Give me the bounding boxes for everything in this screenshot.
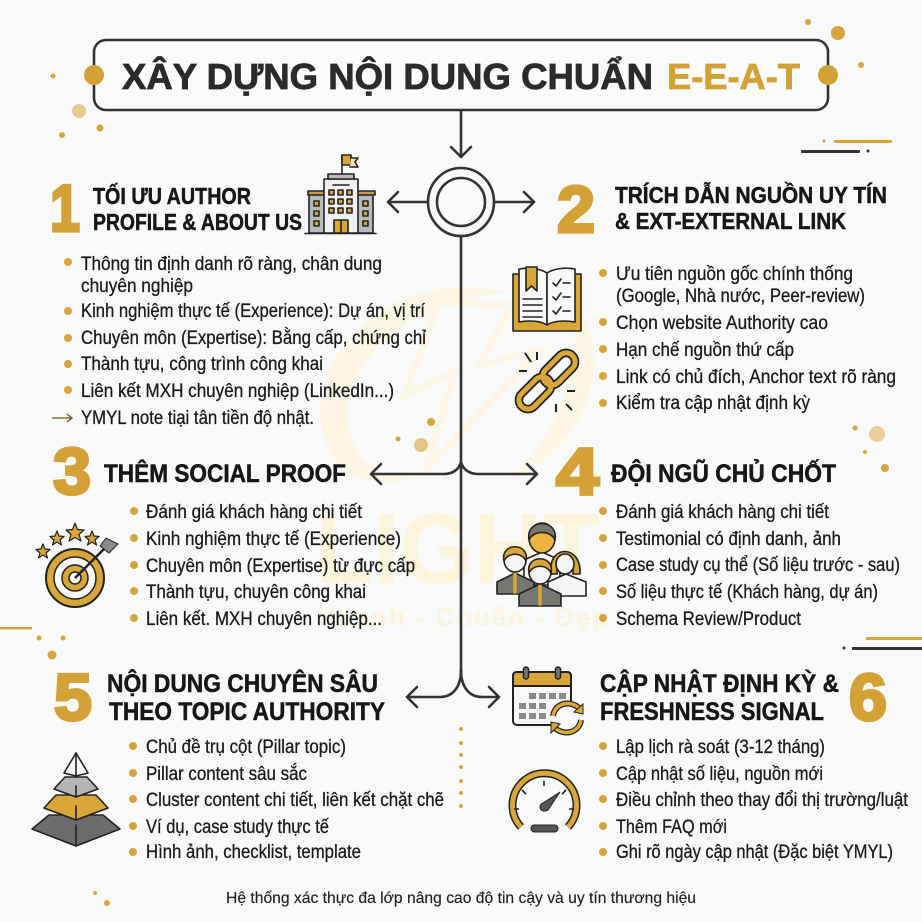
heading 5: NỘI DUNG CHUYÊN SÂU	[107, 668, 378, 698]
list 2: Ưu tiên nguồn gốc chính thống	[616, 264, 853, 285]
title banner	[84, 40, 838, 110]
list 6	[599, 737, 909, 863]
list 3: Kinh nghiệm thực tế (Experience)	[146, 529, 401, 550]
list 2	[599, 264, 896, 414]
list 1: Thông tin định danh rõ ràng, chân dung	[81, 254, 382, 275]
heading 2: TRÍCH DẪN NGUỒN UY TÍN	[615, 180, 887, 208]
list 5: Hình ảnh, checklist, template	[146, 842, 361, 863]
list 3: Liên kết. MXH chuyên nghiệp...	[146, 609, 382, 630]
number 1: 1	[50, 171, 80, 245]
list 4: Số liệu thực tế (Khách hàng, dự án)	[616, 582, 878, 603]
heading 1: PROFILE & ABOUT US	[93, 209, 302, 235]
list 4: Schema Review/Product	[616, 609, 802, 630]
watermark: LIGHT logo: LIGHT	[315, 493, 600, 605]
list 5	[129, 737, 444, 863]
watermark: LIGHT logo	[315, 287, 608, 632]
heading 5	[107, 668, 385, 726]
icon: chain link	[515, 349, 579, 413]
list 3: Chuyên môn (Expertise) từ đực cấp	[146, 556, 415, 577]
list 5: Ví dụ, case study thực tế	[146, 817, 329, 838]
icon: building with flag	[305, 155, 376, 234]
title accent E-E-A-T: E-E-A-T	[667, 56, 800, 97]
central connector with arrows	[371, 111, 537, 707]
title text: XÂY DỰNG NỘI DUNG CHUẨN	[122, 55, 653, 97]
list 5: Chủ đề trụ cột (Pillar topic)	[146, 737, 346, 758]
list 4: Testimonial có định danh, ảnh	[616, 529, 841, 550]
list 2: Kiểm tra cập nhật định kỳ	[616, 393, 810, 414]
heading 1: TỐI ƯU AUTHOR	[93, 182, 251, 209]
list 1: Kinh nghiệm thực tế (Experience): Dự án, vị trí	[81, 301, 426, 322]
icon: open book with checklist	[513, 267, 581, 331]
list 1: Chuyên môn (Expertise): Bằng cấp, chứng chỉ	[81, 327, 427, 349]
panel 5: topic authority	[32, 660, 444, 863]
list 3: Thành tựu, chuyên công khai	[146, 582, 366, 603]
list 6: Thêm FAQ mới	[616, 817, 727, 838]
list 6: Cập nhật số liệu, nguồn mới	[616, 764, 823, 785]
number 2: 2	[557, 172, 595, 246]
list 1	[52, 254, 427, 429]
list 1: YMYL note tiại tân tiền độ nhật.	[81, 408, 314, 429]
panel 2: citations	[513, 172, 896, 414]
list 2: Hạn chế nguồn thứ cấp	[616, 340, 794, 361]
list 6: Lập lịch rà soát (3-12 tháng)	[616, 737, 825, 758]
list 1: chuyên nghiệp	[81, 276, 193, 297]
list 1: Thành tựu, công trình công khai	[81, 354, 323, 375]
list 4: Đánh giá khách hàng chi tiết	[616, 502, 830, 523]
icon: layered pyramid	[32, 753, 120, 846]
number 4: 4	[556, 434, 599, 508]
list 2: Link có chủ đích, Anchor text rõ ràng	[616, 367, 896, 388]
heading 3: THÊM SOCIAL PROOF	[104, 458, 346, 488]
number 5: 5	[54, 660, 92, 734]
list 3: Đánh giá khách hàng chi tiết	[146, 502, 363, 523]
panel 3: social proof	[36, 434, 415, 630]
heading 2: & EXT-EXTERNAL LINK	[615, 208, 846, 234]
list 5: Pillar content sâu sắc	[146, 763, 307, 785]
list 3	[130, 502, 415, 630]
icon: speedometer gauge	[512, 773, 577, 832]
panel 6: freshness	[512, 660, 909, 863]
list 2: (Google, Nhà nước, Peer-review)	[616, 286, 865, 307]
heading 6: CẬP NHẬT ĐỊNH KỲ &	[600, 668, 839, 698]
heading 1	[93, 182, 302, 235]
panel 4: key team	[497, 434, 900, 630]
number 3: 3	[53, 434, 91, 508]
list 4	[599, 502, 900, 630]
panel 1: author profile	[50, 155, 427, 429]
list 1: Liên kết MXH chuyên nghiệp (LinkedIn...)	[81, 381, 394, 402]
footer caption: Hệ thống xác thực đa lớp nâng cao độ tin cậy và uy tín thương hiệu	[226, 890, 696, 907]
icon: target with arrow and stars	[36, 523, 118, 607]
list 5: Cluster content chi tiết, liên kết chặt chẽ	[146, 790, 444, 811]
watermark: LIGHT logo: Nhanh - Chuẩn - Đẹp	[316, 602, 608, 632]
list 2: Chọn website Authority cao	[616, 313, 828, 334]
heading 6: FRESHNESS SIGNAL	[600, 698, 824, 726]
heading 5: THEO TOPIC AUTHORITY	[109, 698, 385, 726]
arrow: YMYL note	[52, 414, 72, 422]
icon: calendar with refresh arrows	[513, 667, 584, 735]
heading 4: ĐỘI NGŨ CHỦ CHỐT	[611, 458, 836, 488]
icon: team of four people	[497, 523, 586, 606]
heading 2	[615, 180, 887, 234]
heading 6	[600, 668, 839, 726]
number 6: 6	[849, 660, 887, 734]
